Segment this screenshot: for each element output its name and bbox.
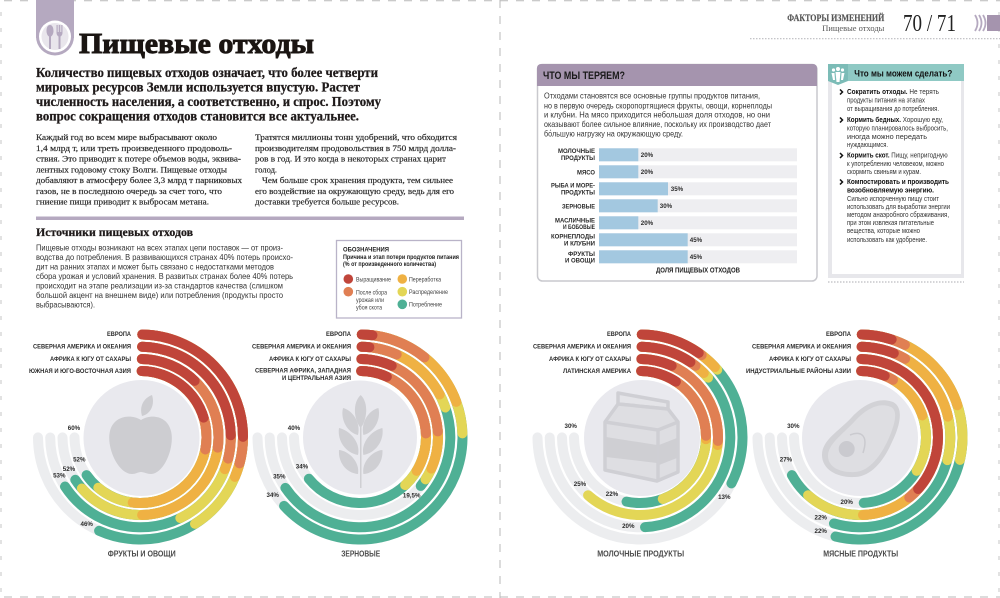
- chart: meat: [746, 331, 964, 558]
- percentages: [780, 423, 853, 535]
- icon: avocado: [822, 400, 900, 477]
- legend: (% от произведенного количества): [343, 261, 436, 268]
- action list: методом анаэробного сбраживания,: [847, 210, 949, 219]
- region labels: ЕВРОПА: [826, 331, 851, 338]
- section paragraph: большой акцент на внешнем виде) или потребления (продукты просто: [36, 290, 283, 300]
- bar labels: РЫБА И МОРЕ-: [551, 183, 595, 190]
- lead paragraph: мировых ресурсов Земли используется впустую. Растет: [36, 80, 361, 94]
- rings: grains: [256, 333, 464, 541]
- region labels: [252, 331, 351, 382]
- percentages: [53, 425, 93, 528]
- bar values: 20%: [641, 220, 654, 227]
- section paragraph: сбора урожая и условий хранения. В развитых странах более 40% потерь: [36, 271, 293, 281]
- bar values: 45%: [690, 254, 703, 261]
- body text: left column: лентных годовому стоку Волги. Пищевые отходы: [36, 165, 228, 174]
- panel intro text: [544, 91, 772, 138]
- body text: left column: добавляют в атмосферу более 3,3 млрд т парниковых: [36, 176, 242, 185]
- icon: people tab: [828, 64, 848, 85]
- lead paragraph: вопрос сокращения отходов становится все актуальнее.: [36, 108, 359, 124]
- page header: running head: [787, 13, 885, 33]
- region labels: АФРИКА К ЮГУ ОТ САХАРЫ: [50, 356, 131, 363]
- action list: которую планировалось выбросить,: [847, 124, 948, 132]
- body text: right column: производителям продовольствия в 750 млрд долла-: [255, 144, 456, 153]
- body text: left column: [36, 133, 242, 206]
- bar values: 20%: [641, 152, 654, 159]
- action list: продукты питания на этапах: [847, 96, 925, 104]
- percentages: [267, 425, 421, 500]
- section paragraph: выбрасываются).: [36, 300, 95, 310]
- bar labels: И КЛУБНИ: [564, 240, 595, 247]
- action list: использовать для выработки энергии: [847, 202, 950, 211]
- body text: right column: ров в год. И это когда в некоторых странах царит: [255, 154, 446, 164]
- page header: running head: Пищевые отходы: [822, 23, 885, 33]
- rings: dairy: [536, 333, 744, 541]
- action list: Кормить бедных. Хорошую еду,: [847, 115, 943, 124]
- percentages: 46%: [81, 521, 93, 528]
- region labels: [533, 331, 631, 375]
- axis title: ДОЛЯ ПИЩЕВЫХ ОТХОДОВ: [656, 268, 740, 275]
- panel intro text: бо́льшую нагрузку на окружающую среду.: [544, 128, 683, 138]
- panel intro text: Отходами становятся все основные группы продуктов питания,: [544, 91, 760, 101]
- section paragraph: [36, 242, 293, 310]
- panel: what we lose: [537, 64, 817, 281]
- bar values: [641, 152, 703, 261]
- bar labels: ЗЕРНОВЫЕ: [562, 203, 596, 210]
- percentages: 27%: [780, 456, 793, 464]
- bar labels: МАСЛИЧНЫЕ: [555, 217, 596, 224]
- body text: left column: гниение пищи приводит к выбросам метана.: [36, 198, 209, 206]
- rings: fruits and vegetables: [36, 333, 245, 541]
- bar labels: ПРОДУКТЫ: [561, 155, 595, 162]
- region labels: СЕВЕРНАЯ АМЕРИКА И ОКЕАНИЯ: [33, 344, 131, 350]
- bar labels: ПРОДУКТЫ: [561, 189, 595, 196]
- section paragraph: Пищевые отходы возникают на всех этапах цепи поставок — от произ-: [36, 242, 283, 252]
- percentages: 40%: [288, 425, 301, 432]
- percentages: 30%: [565, 423, 577, 430]
- action list: Сократить отходы. Не терять: [847, 87, 939, 96]
- lead paragraph: [36, 65, 381, 124]
- legend: Потребление: [409, 300, 442, 308]
- lead paragraph: численность населения, а соответственно, и спрос. Поэтому: [36, 94, 381, 109]
- percentages: 22%: [815, 528, 827, 535]
- page tab with chevrons: [975, 15, 1000, 31]
- panel intro text: оказывают более сильное влияние, поскольку их производство дает: [544, 119, 771, 129]
- icon: plate and cutlery tab: [36, 0, 74, 56]
- action list: использовать как удобрение.: [847, 235, 927, 244]
- percentages: 20%: [841, 499, 853, 506]
- percentages: 34%: [296, 464, 309, 470]
- legend: урожая или: [356, 297, 384, 304]
- bar values: 45%: [690, 237, 703, 244]
- bar labels: МЯСО: [577, 169, 595, 176]
- legend: Причина и этап потери продуктов питания: [343, 254, 459, 261]
- region labels: [29, 331, 131, 375]
- bar labels: [551, 148, 596, 265]
- bar labels: И БОБОВЫЕ: [563, 224, 596, 231]
- panel heading: ЧТО МЫ ТЕРЯЕМ?: [543, 70, 625, 82]
- region labels: СЕВЕРНАЯ АФРИКА, ЗАПАДНАЯ: [255, 367, 351, 374]
- percentages: 13%: [718, 494, 731, 501]
- percentages: 30%: [787, 423, 800, 430]
- percentages: 25%: [574, 481, 587, 488]
- percentages: 60%: [68, 425, 81, 432]
- action list: нуждающимся.: [847, 140, 888, 149]
- section heading: Источники пищевых отходов: [36, 225, 193, 239]
- chart: fruits and vegetables: [29, 331, 245, 558]
- bar values: 30%: [660, 203, 673, 210]
- region labels: ЕВРОПА: [107, 331, 131, 338]
- legend: Выращивание: [356, 276, 391, 284]
- action list: скормить свиньям и курам.: [847, 167, 921, 176]
- percentages: 35%: [273, 474, 286, 480]
- region labels: ЕВРОПА: [326, 331, 351, 338]
- percentages: 53%: [53, 472, 66, 480]
- chart: dairy: [533, 331, 744, 558]
- chart title: ФРУКТЫ И ОВОЩИ: [108, 550, 176, 558]
- legend: [336, 240, 462, 318]
- body text: right column: Тратятся миллионы тонн удобрений, что обходится: [255, 133, 457, 142]
- action list: возобновляемую энергию.: [847, 186, 934, 194]
- panel heading: Что мы можем сделать?: [854, 68, 952, 79]
- icon: milk carton: [605, 393, 678, 481]
- title: Пищевые отходы: [79, 28, 314, 60]
- region labels: ИНДУСТРИАЛЬНЫЕ РАЙОНЫ АЗИИ: [746, 366, 851, 375]
- bar values: 35%: [671, 186, 684, 193]
- chart: grains: [252, 331, 464, 558]
- lead paragraph: Количество пищевых отходов означает, что более четверти: [36, 65, 378, 80]
- action list: Компостировать и производить: [847, 177, 950, 186]
- percentages: 52%: [73, 456, 86, 464]
- percentages: 52%: [63, 466, 76, 473]
- rings: meat: [756, 333, 964, 541]
- legend: После сбора: [356, 288, 387, 296]
- percentages: 22%: [815, 514, 827, 522]
- panel intro text: и клубни. На мясо приходится небольшая доля отходов, но они: [544, 110, 770, 120]
- action list: иногда можно передать: [847, 132, 927, 141]
- bar chart: [551, 148, 797, 275]
- bar labels: МОЛОЧНЫЕ: [558, 148, 596, 155]
- panel intro text: но в первую очередь скоропортящиеся фрукты, овощи, корнеплоды: [544, 100, 772, 110]
- icon: wheat: [339, 395, 383, 488]
- legend: убоя скота: [356, 304, 382, 312]
- panel: what we can do: [828, 64, 964, 278]
- body text: left column: ствия. Это приводит к потере объемов воды, эквива-: [36, 154, 241, 164]
- region labels: ЛАТИНСКАЯ АМЕРИКА: [563, 368, 631, 375]
- section paragraph: водства до потребления. В развивающихся странах 40% потерь происхо-: [36, 252, 293, 262]
- body text: left column: Каждый год во всем мире выбрасывают около: [36, 133, 217, 142]
- page numbers: 70 / 71: [903, 11, 956, 37]
- region labels: ЮЖНАЯ И ЮГО-ВОСТОЧНАЯ АЗИЯ: [29, 368, 131, 375]
- panel header: [848, 64, 964, 81]
- region labels: [746, 331, 851, 375]
- body text: right column: Чем больше срок хранения продукта, тем сильнее: [262, 176, 453, 185]
- percentages: 19,5%: [403, 492, 421, 500]
- action list: от выращивания до потребления.: [847, 104, 939, 113]
- body text: right column: голод.: [255, 165, 277, 174]
- section paragraph: дит на ранних этапах и может быть связано с недостатками методов: [36, 261, 275, 271]
- chart title: МЯСНЫЕ ПРОДУКТЫ: [823, 550, 898, 558]
- bar labels: ФРУКТЫ: [568, 251, 595, 258]
- bar values: 20%: [641, 169, 654, 176]
- chart title: МОЛОЧНЫЕ ПРОДУКТЫ: [597, 550, 684, 558]
- action list: [840, 87, 950, 244]
- percentages: [565, 423, 731, 530]
- region labels: СЕВЕРНАЯ АМЕРИКА И ОКЕАНИЯ: [752, 344, 851, 350]
- bar labels: КОРНЕПЛОДЫ: [551, 234, 595, 241]
- body text: right column: [255, 133, 457, 206]
- region labels: ЕВРОПА: [607, 331, 631, 338]
- percentages: 34%: [267, 492, 279, 499]
- icon: apple: [109, 395, 172, 474]
- body text: right column: доставки требуется больше ресурсов.: [255, 198, 399, 206]
- action list: вещества, которые можно: [847, 226, 920, 235]
- action list: Сильно испорченную пищу стоит: [847, 194, 940, 203]
- region labels: СЕВЕРНАЯ АМЕРИКА И ОКЕАНИЯ: [533, 344, 631, 350]
- region labels: СЕВЕРНАЯ АМЕРИКА И ОКЕАНИЯ: [252, 344, 351, 350]
- legend: Переработка: [409, 276, 441, 284]
- action list: при этом извлекая питательные: [847, 218, 934, 227]
- action list: к употреблению человеком, можно: [847, 159, 944, 168]
- percentages: 22%: [606, 491, 619, 498]
- percentages: 20%: [622, 523, 635, 530]
- section paragraph: происходит на этапе реализации из-за стандартов качества (слишком: [36, 280, 283, 290]
- body text: left column: 1,4 млрд т, или треть произведенного продоволь-: [36, 144, 232, 153]
- action list: Кормить скот. Пищу, непригодную: [847, 150, 948, 160]
- region labels: АФРИКА К ЮГУ ОТ САХАРЫ: [269, 356, 351, 363]
- chart title: ЗЕРНОВЫЕ: [341, 550, 381, 558]
- region labels: АФРИКА К ЮГУ ОТ САХАРЫ: [769, 356, 851, 363]
- region labels: АФРИКА К ЮГУ ОТ САХАРЫ: [549, 356, 631, 363]
- bar labels: И ОВОЩИ: [565, 258, 595, 265]
- legend: ОБОЗНАЧЕНИЯ: [343, 247, 389, 254]
- legend: Распределение: [409, 289, 448, 296]
- page header: running head: ФАКТОРЫ ИЗМЕНЕНИЙ: [787, 13, 884, 23]
- body text: right column: его воздействие на окружающую среду, ведь для его: [255, 187, 454, 196]
- panel header: [537, 64, 817, 86]
- body text: left column: газов, не в последнюю очередь за счет того, что: [36, 187, 222, 196]
- region labels: И ЦЕНТРАЛЬНАЯ АЗИЯ: [282, 375, 351, 382]
